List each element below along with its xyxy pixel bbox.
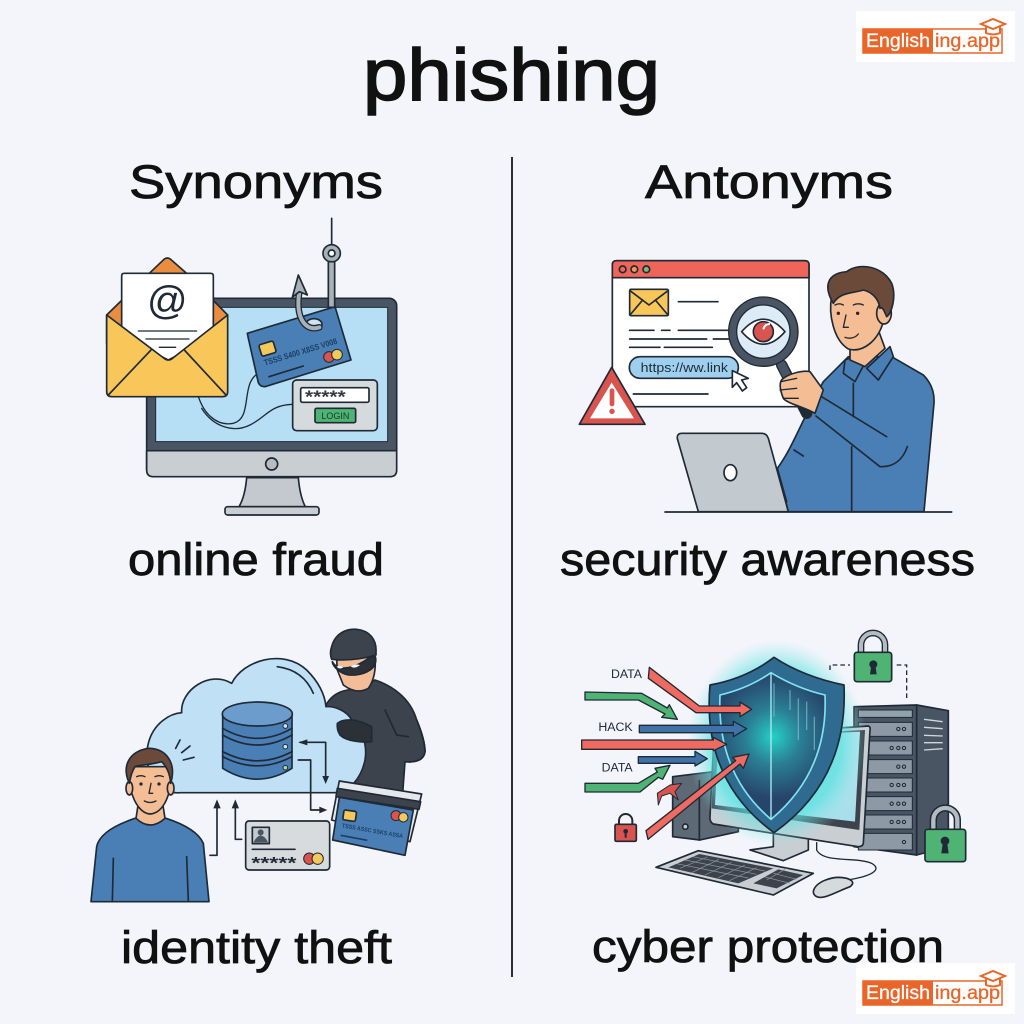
victim person <box>91 748 209 902</box>
connecting wires <box>197 373 293 429</box>
attack labels: DATA <box>602 760 633 774</box>
suspicious link <box>629 357 748 391</box>
fish hook and credit card <box>247 218 351 387</box>
illustration: identity theft <box>91 629 425 902</box>
stolen credit cards <box>332 781 422 855</box>
server tower <box>854 705 948 855</box>
label: online fraud: online fraud <box>128 534 384 585</box>
illustration: phishing computer <box>107 218 397 515</box>
mouse and cable <box>813 843 876 897</box>
threat arrows <box>582 667 752 839</box>
label: security awareness: security awareness <box>560 534 975 585</box>
heading: synonyms: Synonyms <box>129 155 383 208</box>
login form <box>293 380 377 431</box>
desk line <box>665 509 952 514</box>
id card: ***** <box>251 854 297 873</box>
monitor <box>710 726 870 861</box>
monitor <box>147 298 397 515</box>
logo: bottom right <box>856 963 1015 1014</box>
red padlock <box>615 814 636 841</box>
keyboard <box>656 851 813 895</box>
bottom padlock <box>925 808 966 862</box>
shield <box>709 657 844 833</box>
label: cyber protection: cyber protection <box>592 921 944 972</box>
illustration: security awareness <box>579 261 952 512</box>
laptop <box>677 433 836 512</box>
top padlock with dashed connector <box>830 633 907 698</box>
title: phishing <box>363 35 660 116</box>
man inspecting <box>777 267 934 512</box>
database server <box>222 702 292 779</box>
thief arm and glove <box>337 710 425 762</box>
logo: top right: English <box>866 31 930 52</box>
attack labels <box>598 667 643 774</box>
center divider <box>511 157 513 977</box>
warning triangle <box>579 367 645 424</box>
logo: bottom right: English <box>866 983 930 1004</box>
logo: top right <box>856 11 1015 62</box>
label: identity theft: identity theft <box>121 922 393 973</box>
logo: top right: ing.app <box>935 31 1000 52</box>
login form: LOGIN <box>321 411 349 421</box>
suspicious link: https://ww.link <box>641 360 728 375</box>
id card <box>246 821 330 873</box>
pc tower <box>673 772 738 840</box>
email envelope: @ <box>147 279 188 323</box>
logo: bottom right: ing.app <box>935 983 1000 1004</box>
data arrows <box>210 739 329 855</box>
attack labels: HACK <box>598 720 633 734</box>
thief body and head <box>326 629 425 793</box>
email envelope <box>107 258 228 397</box>
login form: ***** <box>305 387 346 407</box>
glow <box>687 640 867 847</box>
cloud <box>147 659 366 793</box>
attack labels: DATA <box>611 667 643 681</box>
heading: antonyms: Antonyms <box>645 155 893 208</box>
browser window <box>612 261 809 407</box>
magnifying glass <box>733 301 823 413</box>
fish hook and credit card: TSSS S400 X8SS V008 <box>263 336 339 368</box>
stolen credit cards: TSSS ASSC SSKS ASSA <box>341 823 404 840</box>
illustration: cyber protection <box>582 633 966 897</box>
